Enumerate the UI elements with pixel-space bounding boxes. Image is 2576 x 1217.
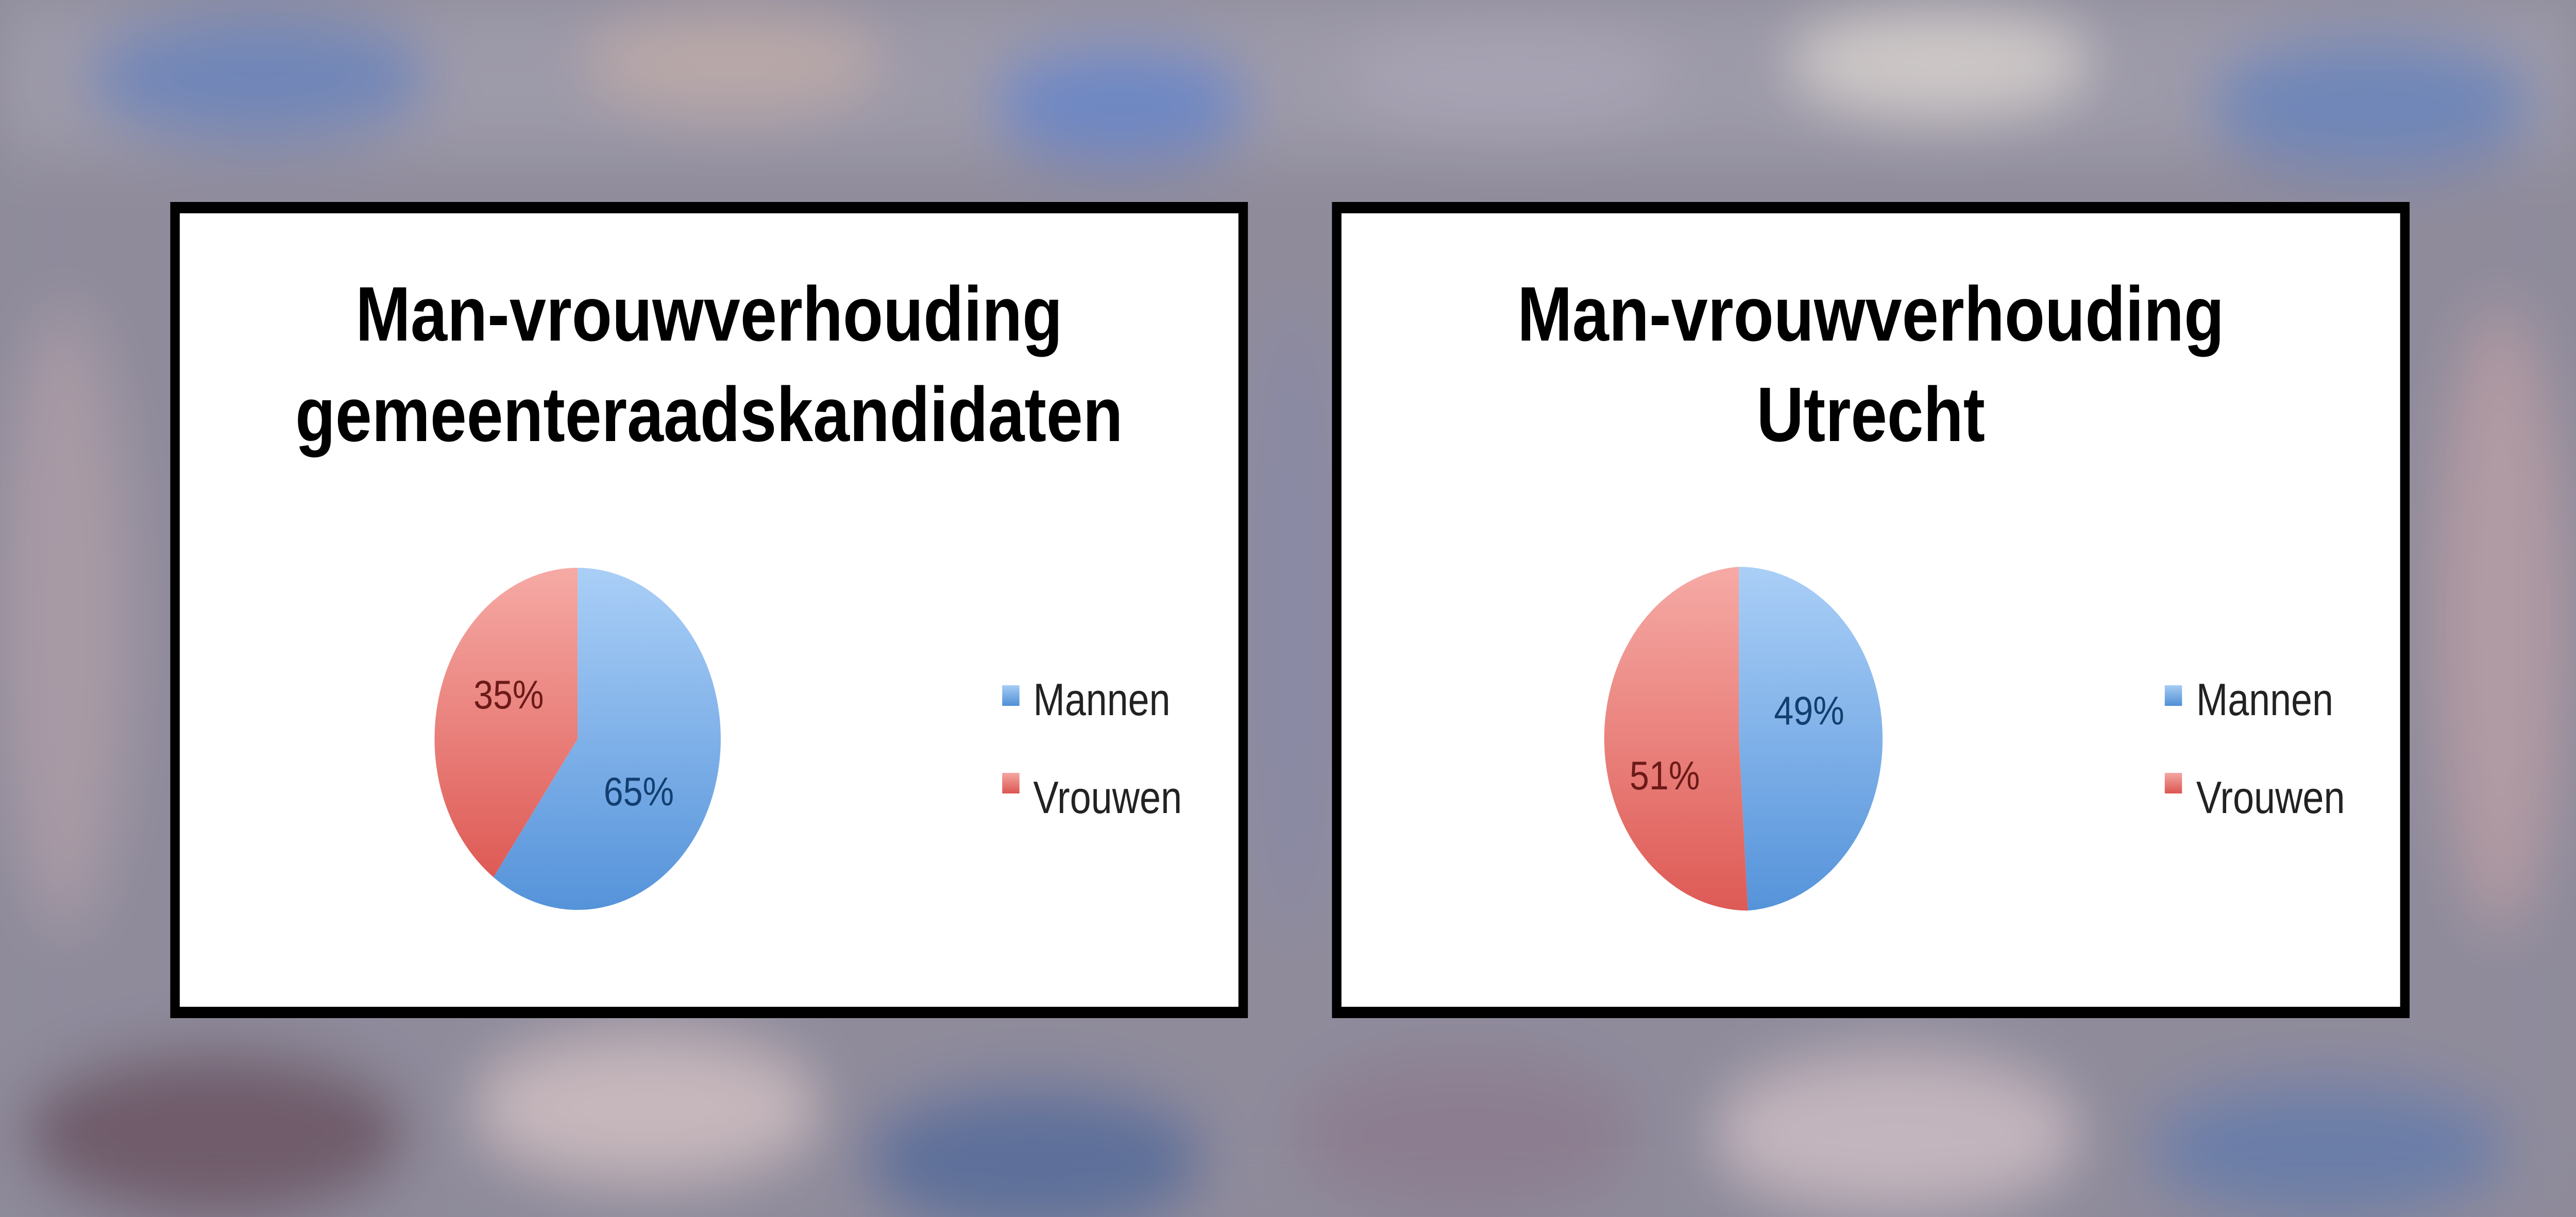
title: left: gemeenteraadskandidaten [295, 372, 1123, 458]
title: right [1517, 272, 2224, 458]
legend: right: Vrouwen [2196, 773, 2345, 823]
pie chart: left [434, 568, 721, 910]
pie chart: left: 35% [473, 673, 544, 717]
panel: right chart [1337, 208, 2405, 1012]
legend: left: Mannen [1033, 675, 1171, 725]
title: left: Man-vrouwverhouding [355, 272, 1062, 358]
legend: right [2165, 675, 2345, 823]
pie chart: right [1604, 567, 1883, 910]
legend: left [1002, 675, 1182, 823]
legend: right: Mannen [2196, 675, 2333, 725]
legend: left: Vrouwen [1033, 773, 1182, 823]
title: right: Man-vrouwverhouding [1517, 272, 2224, 358]
panel: left chart [175, 208, 1243, 1012]
title: left [295, 272, 1123, 458]
pie chart: left: 65% [604, 770, 674, 814]
pie chart: right: 51% [1630, 754, 1700, 798]
title: right: Utrecht [1756, 372, 1985, 458]
pie chart: right: 49% [1774, 689, 1844, 733]
